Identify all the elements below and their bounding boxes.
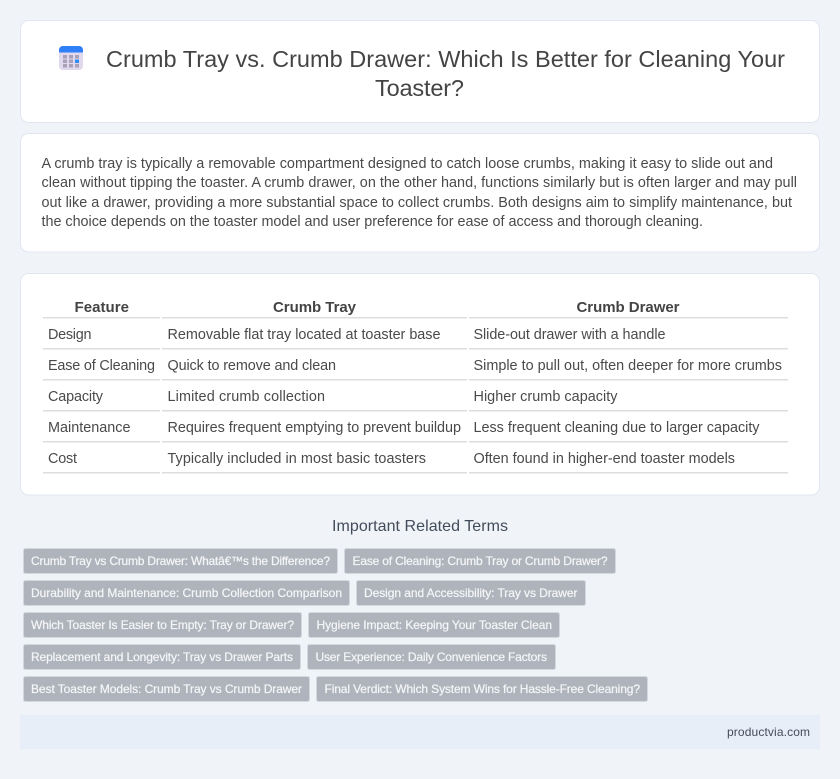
table row: capacity bbox=[43, 379, 788, 405]
title: Toaster? bbox=[375, 75, 464, 101]
tag 3: Durability and Maintenance: Crumb Collection Comparison bbox=[31, 586, 342, 600]
table header row: Feature bbox=[74, 299, 129, 316]
table row: capacity: Higher crumb capacity bbox=[474, 389, 618, 405]
table row: maintenance: Less frequent cleaning due to larger capacity bbox=[474, 420, 760, 436]
tag 2 bbox=[344, 548, 616, 574]
text block: description bbox=[42, 156, 797, 230]
table row: design: Slide-out drawer with a handle bbox=[474, 327, 666, 343]
table row: cost: Often found in higher-end toaster models bbox=[474, 451, 735, 467]
tag list bbox=[24, 548, 648, 702]
tag 9 bbox=[24, 676, 310, 702]
tag 10 bbox=[316, 676, 648, 702]
tag 5: Which Toaster Is Easier to Empty: Tray or Drawer? bbox=[31, 618, 294, 632]
table row: ease of cleaning: Quick to remove and clean bbox=[168, 358, 336, 374]
text block: description: out like a drawer, providing a more substantial space to collect crumbs. Both designs aim to simplify maintenance, but bbox=[42, 195, 792, 211]
table row: cost: Cost bbox=[48, 451, 77, 467]
panel: intro text bbox=[20, 134, 820, 252]
table header row: Crumb Drawer bbox=[576, 299, 680, 316]
table row: maintenance bbox=[43, 410, 788, 436]
table header row bbox=[74, 299, 680, 316]
table row: ease of cleaning: Ease of Cleaning bbox=[48, 358, 155, 374]
icon: calendar bbox=[59, 46, 83, 70]
heading: important related terms: Important Related Terms bbox=[332, 518, 508, 535]
table row: maintenance: Maintenance bbox=[48, 420, 130, 436]
title: Crumb Tray vs. Crumb Drawer: Which Is Better for Cleaning Your bbox=[106, 46, 785, 72]
table row: design bbox=[43, 317, 788, 343]
tag 10: Final Verdict: Which System Wins for Hassle-Free Cleaning? bbox=[324, 682, 640, 696]
footer bar bbox=[20, 715, 820, 749]
table row: ease of cleaning bbox=[43, 348, 788, 374]
table row: ease of cleaning: Simple to pull out, often deeper for more crumbs bbox=[474, 358, 782, 374]
table header row: Crumb Tray bbox=[273, 299, 357, 316]
table row: capacity: Limited crumb collection bbox=[168, 389, 325, 405]
table row: cost bbox=[43, 441, 788, 474]
tag 4 bbox=[356, 580, 586, 606]
table row: design: Design bbox=[48, 327, 92, 343]
footer source: productvia.com bbox=[727, 725, 810, 739]
tag 6: Hygiene Impact: Keeping Your Toaster Clean bbox=[316, 618, 552, 632]
table row: maintenance: Requires frequent emptying to prevent buildup bbox=[168, 420, 461, 436]
tag 6 bbox=[308, 612, 560, 638]
table row: design: Removable flat tray located at toaster base bbox=[168, 327, 440, 343]
tag 8 bbox=[308, 644, 556, 670]
text block: description: A crumb tray is typically a removable compartment designed to catch loose crumbs, making it easy to slide out and bbox=[42, 156, 773, 172]
tag 1 bbox=[24, 548, 338, 574]
tag 7: Replacement and Longevity: Tray vs Drawer Parts bbox=[31, 650, 293, 664]
tag 8: User Experience: Daily Convenience Factors bbox=[316, 650, 547, 664]
table row: capacity: Capacity bbox=[48, 389, 104, 405]
panel: title header bbox=[20, 20, 820, 122]
tag 4: Design and Accessibility: Tray vs Drawer bbox=[364, 586, 578, 600]
tag 3 bbox=[24, 580, 350, 606]
tag 5 bbox=[24, 612, 302, 638]
tag 9: Best Toaster Models: Crumb Tray vs Crumb Drawer bbox=[31, 682, 302, 696]
tag 1: Crumb Tray vs Crumb Drawer: Whatâ€™s the Difference? bbox=[31, 554, 330, 568]
tag 7 bbox=[24, 644, 300, 670]
text block: description: the choice depends on the toaster model and user preference for ease of access and thorough cleaning. bbox=[42, 214, 703, 230]
panel: comparison table bbox=[20, 274, 820, 495]
table row: cost: Typically included in most basic toasters bbox=[168, 451, 426, 467]
text block: description: clean without tipping the toaster. A crumb drawer, on the other hand, functions similarly but is often larger and may pull bbox=[42, 175, 797, 191]
tag 2: Ease of Cleaning: Crumb Tray or Crumb Drawer? bbox=[352, 554, 608, 568]
title bbox=[106, 46, 785, 101]
